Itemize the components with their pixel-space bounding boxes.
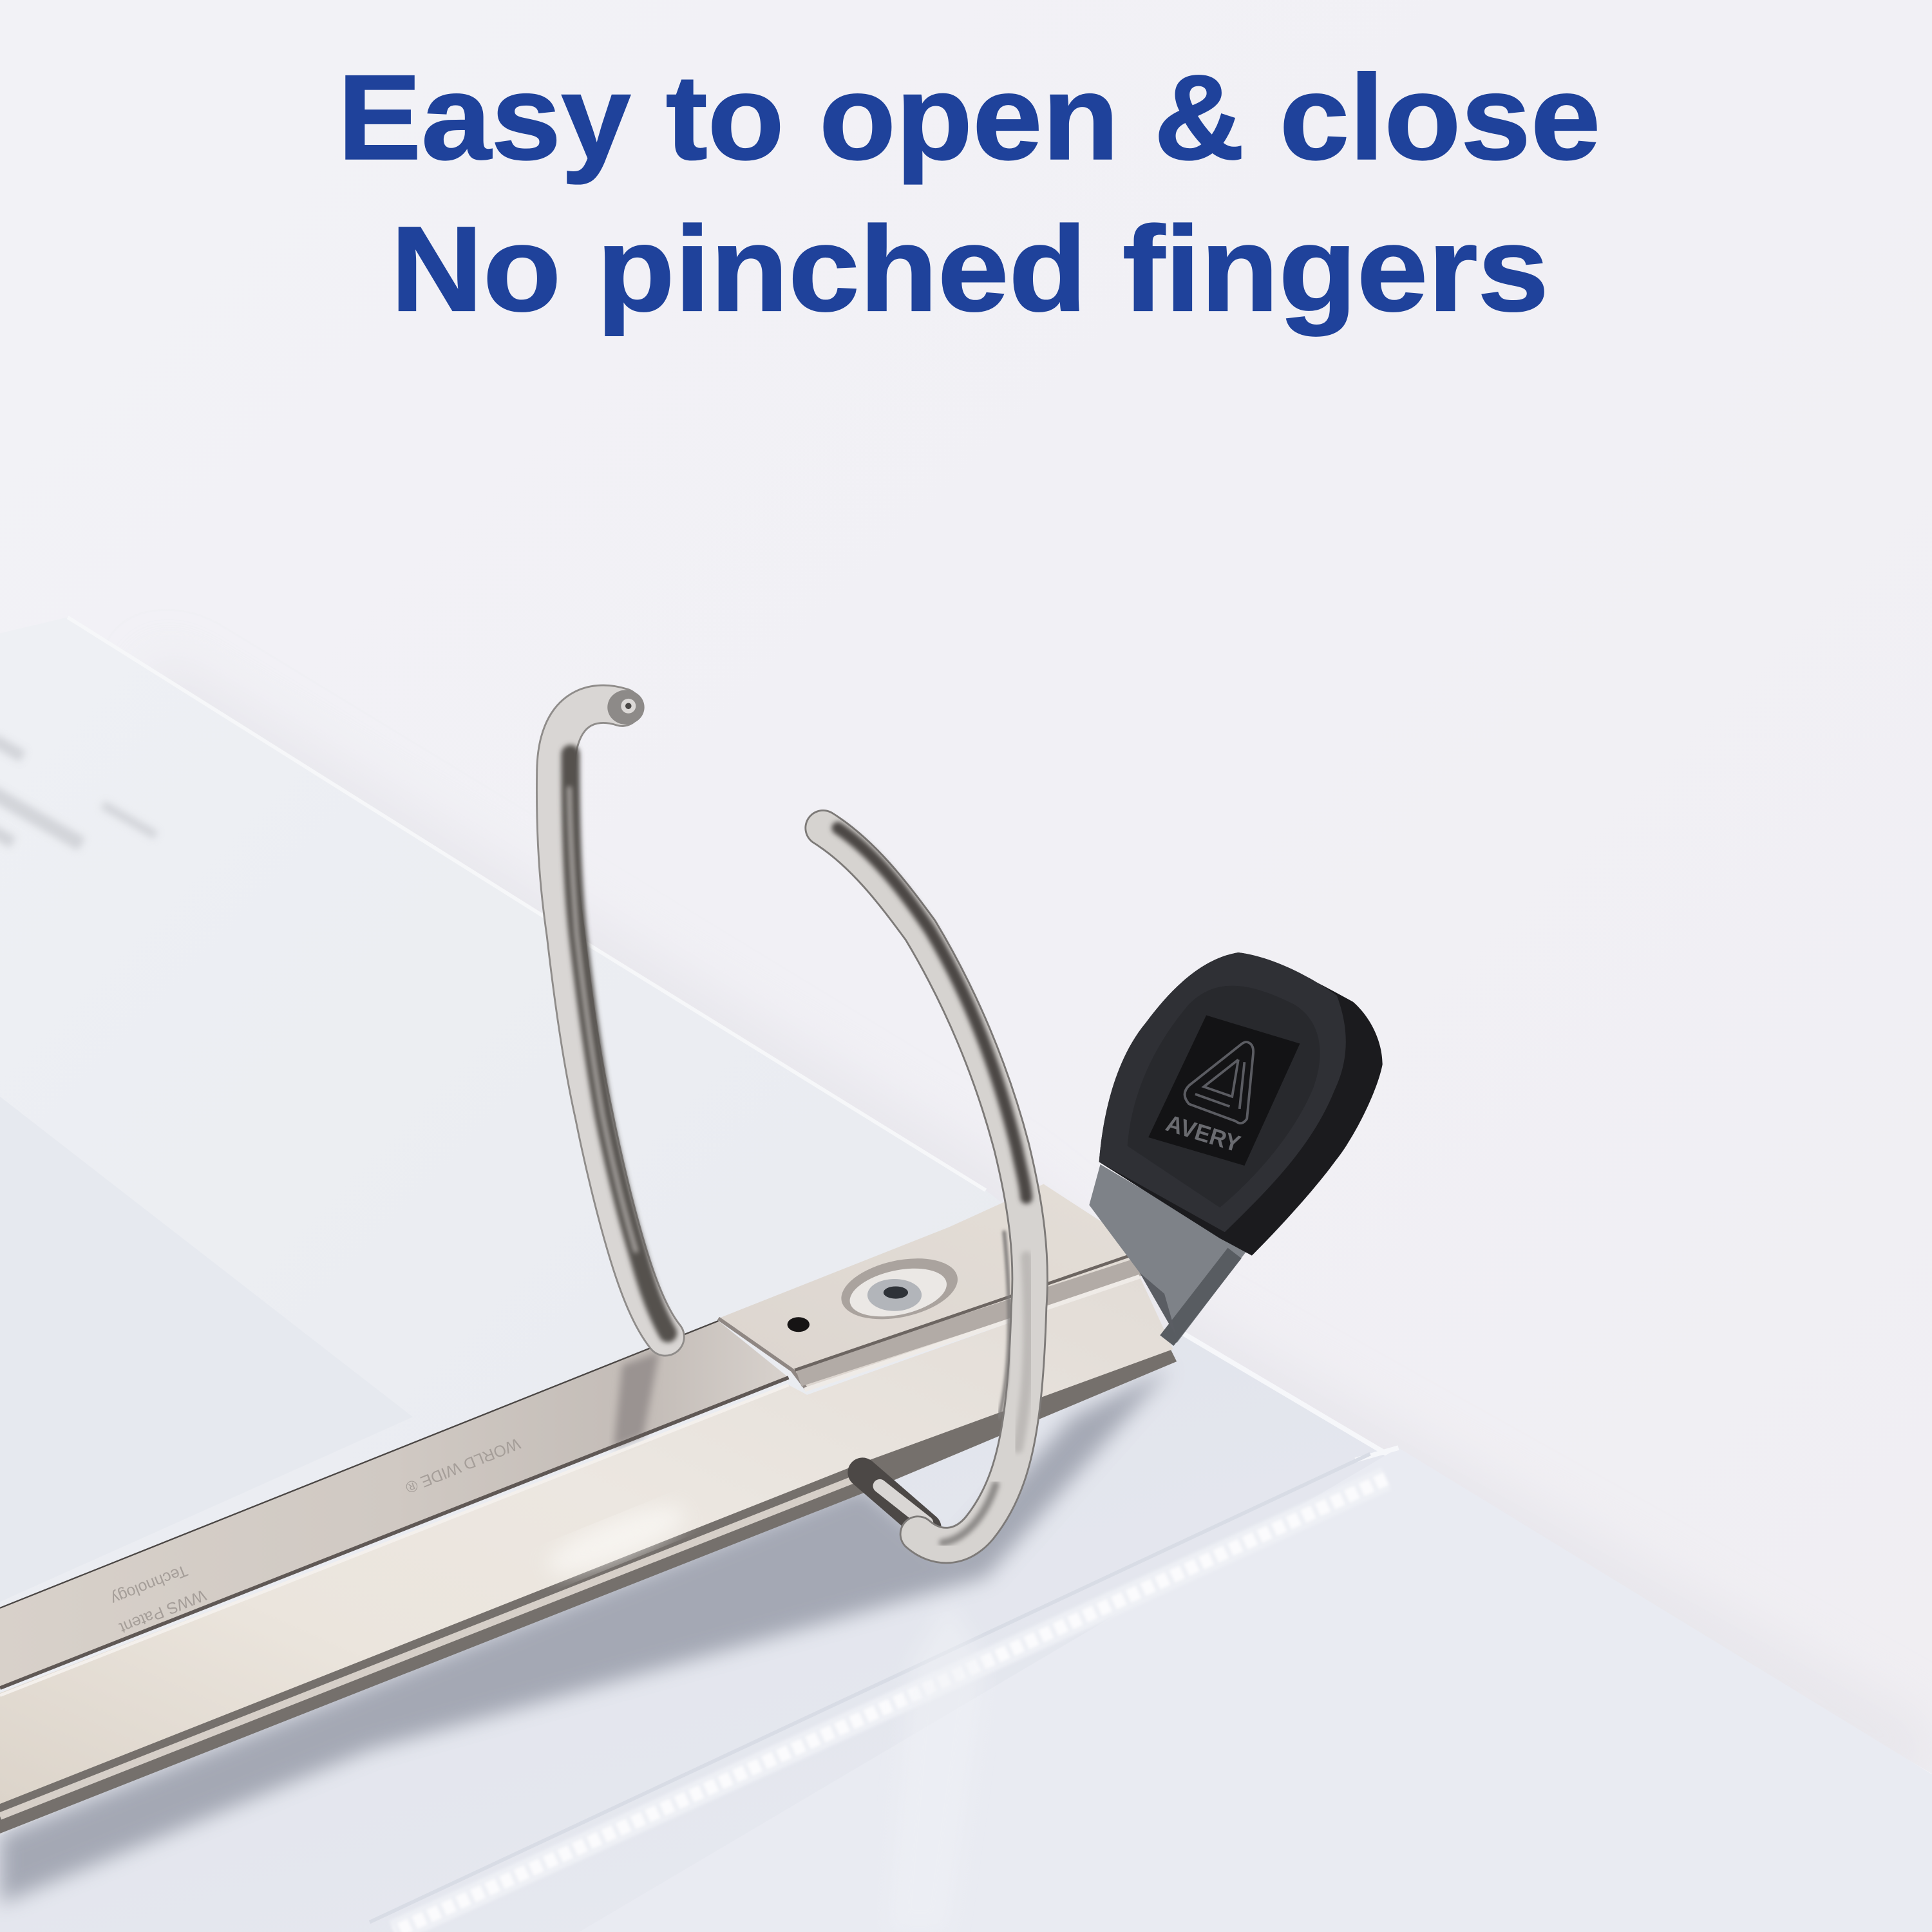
- page shadow on the table: [123, 653, 1932, 1799]
- top face of bar: [0, 1321, 788, 1688]
- seam weld: [394, 1479, 1386, 1932]
- headline line 1: Easy to open & close: [337, 50, 1600, 185]
- stamped text on bar: WORLD WIDE ®: [403, 1434, 523, 1497]
- mechanism shadow: [0, 1368, 1171, 1904]
- lower dark edge of bar: [0, 1349, 1177, 1833]
- blurred printed text on page: [0, 734, 158, 851]
- headline: [337, 50, 1600, 336]
- metal ring mechanism: [0, 1184, 1177, 1833]
- logo wordmark: AVERY: [1163, 1110, 1244, 1157]
- handle: black rubber tab with Avery logo: [1099, 952, 1383, 1256]
- handle stem: [1089, 1164, 1247, 1343]
- stamped text on bar: WWS Patent: [117, 1586, 209, 1637]
- back ring: [556, 690, 668, 1337]
- front face of bar: [0, 1276, 1173, 1804]
- binder cover: [0, 1333, 1932, 1932]
- logo square: [1148, 1016, 1300, 1166]
- stamped text on bar: Technology: [108, 1561, 190, 1609]
- riveted plate: [718, 1184, 1140, 1390]
- stamped text on bar: [108, 1434, 523, 1637]
- headline line 2: No pinched fingers: [391, 201, 1549, 336]
- logo triangle: [1185, 1042, 1253, 1123]
- hinge pin: [862, 1472, 927, 1528]
- paper page stack: [0, 618, 1183, 1848]
- rivet: [836, 1249, 963, 1329]
- front ring: [823, 828, 1030, 1546]
- small hole: [788, 1317, 810, 1332]
